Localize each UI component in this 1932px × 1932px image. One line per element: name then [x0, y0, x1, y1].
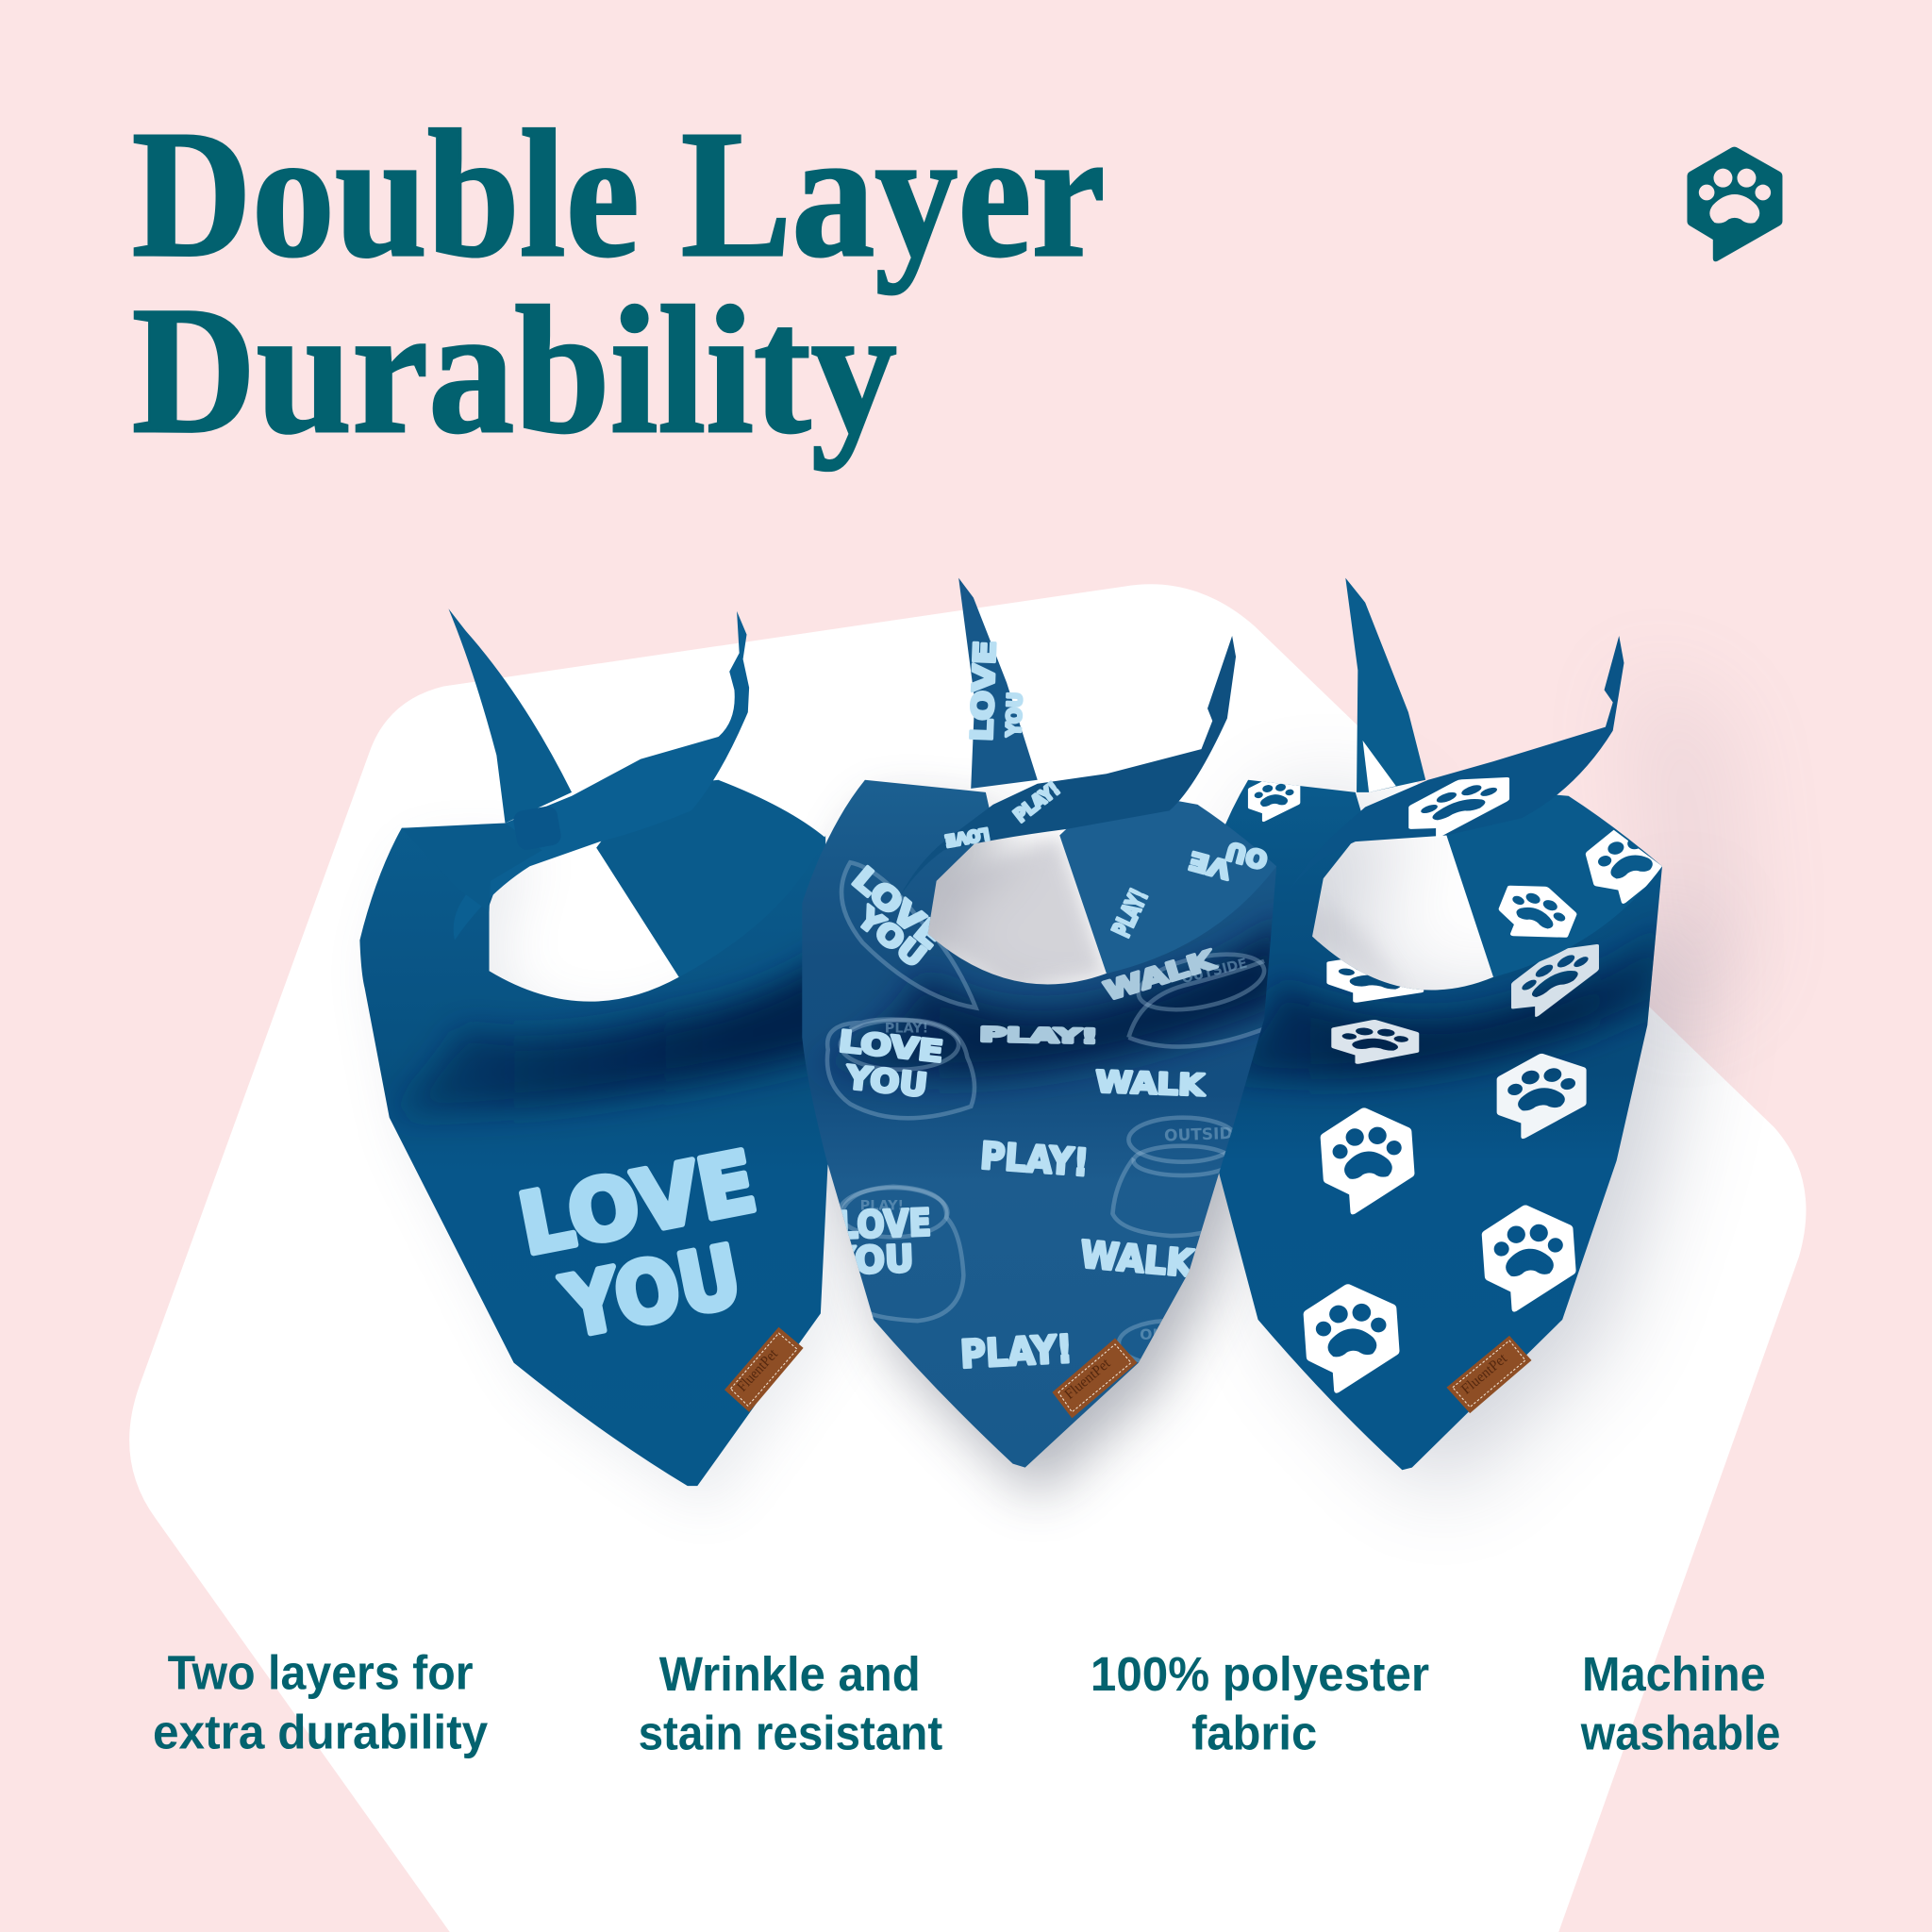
- feature caption: machine washable: [1580, 1647, 1780, 1760]
- bandana: Love You solid: [359, 608, 850, 1486]
- icon: paw speech bubble logo: [1687, 147, 1782, 261]
- pattern words: YOU: [850, 900, 932, 974]
- paw print on knot: [1408, 765, 1509, 846]
- tie tail up: [1345, 578, 1425, 792]
- soft shadows beneath bandanas: [377, 665, 1750, 1506]
- pattern words: WALK: [1101, 945, 1220, 1007]
- print on back panel: [1108, 836, 1271, 941]
- paw prints on body: [1248, 774, 1599, 1395]
- front body: [359, 828, 828, 1486]
- leather tag: [724, 1327, 804, 1412]
- bowl outlines: OUTSIDE: [1164, 1124, 1243, 1145]
- bowl outlines: PLAY!: [860, 1199, 904, 1214]
- tie tail up: LOVE: [965, 640, 1003, 742]
- pattern words: WALK: [1095, 1065, 1207, 1103]
- collar fold shadow: [808, 918, 1288, 1078]
- title: Durability: [132, 269, 897, 471]
- leather tag: [1052, 1338, 1138, 1418]
- band text: [943, 778, 1064, 850]
- collar fold shadow: [1214, 924, 1670, 1079]
- tie band: [454, 611, 749, 941]
- back panel of neck: [1446, 789, 1662, 977]
- bowl outlines: OUTSIDE: [1180, 956, 1249, 987]
- pattern words: LOVE: [837, 1202, 932, 1248]
- pattern words: PLAY!: [959, 1326, 1074, 1377]
- collar fold shadow: [390, 942, 850, 1115]
- print: Love You: YOU: [555, 1227, 748, 1357]
- feature caption: machine washable: washable: [1580, 1707, 1780, 1760]
- feature caption: polyester: 100% polyester: [1091, 1647, 1429, 1701]
- title: Double Layer: [132, 92, 1106, 294]
- print: Love You: [511, 1133, 763, 1357]
- feature caption: wrinkle and stain: Wrinkle and: [659, 1647, 921, 1701]
- print: Love You: LOVE: [511, 1133, 763, 1274]
- pattern words: PLAY!: [979, 1024, 1098, 1048]
- front body: [1201, 780, 1662, 1470]
- leather tag: FluentPet: [1061, 1355, 1114, 1403]
- feature caption: machine washable: Machine: [1582, 1647, 1766, 1701]
- pattern words: WALK: [1078, 1234, 1196, 1286]
- pattern words: PLAY!: [979, 1135, 1090, 1185]
- feature caption: wrinkle and stain: [639, 1647, 942, 1760]
- front body: [802, 780, 1276, 1468]
- bowl outlines: PLAY!: [885, 1022, 928, 1037]
- back panel of neck: [596, 780, 825, 977]
- band text: LOVE: [943, 824, 991, 850]
- bandana: Play Walk Love You pattern: [802, 578, 1288, 1468]
- pattern words: YOU: [828, 1238, 914, 1284]
- feature caption: polyester: fabric: [1191, 1707, 1317, 1760]
- pattern words: YOU: [843, 1058, 929, 1105]
- leather tag: [1446, 1336, 1532, 1413]
- feature caption: two layers: extra durability: [153, 1705, 489, 1758]
- feature caption: two layers: Two layers for: [168, 1646, 474, 1700]
- paws in back panel: [1498, 830, 1662, 938]
- feature caption: wrinkle and stain: stain resistant: [639, 1707, 942, 1760]
- feature caption: two layers: [153, 1646, 489, 1758]
- band text: PLAY!: [1009, 778, 1064, 826]
- tie band: [899, 636, 1236, 897]
- tie tail up: [958, 578, 1038, 789]
- print on back panel: VE: [1186, 845, 1234, 884]
- bowl outlines: OUT: [1140, 1325, 1174, 1343]
- print on back panel: OU: [1223, 836, 1271, 874]
- pattern words: [828, 859, 1220, 1377]
- gap between tie pieces: [1363, 741, 1396, 792]
- leather tag: FluentPet: [734, 1346, 781, 1395]
- tie tail left up: [448, 608, 572, 823]
- tie tail up: YOU: [1002, 691, 1026, 738]
- feature caption: polyester: [1091, 1647, 1429, 1760]
- leather tag: FluentPet: [1458, 1350, 1510, 1398]
- white hexagon panel: [129, 584, 1806, 1932]
- back panel of neck: [1059, 789, 1276, 974]
- tie band: [1285, 636, 1624, 897]
- bowl outlines: [827, 859, 1269, 1377]
- pattern words: LOVE: [844, 859, 950, 957]
- title: [132, 92, 1106, 471]
- knot: [512, 805, 562, 851]
- print on back panel: PLAY!: [1108, 885, 1155, 941]
- pattern words: LOVE: [837, 1024, 945, 1070]
- bandana: paw print pattern: [1201, 578, 1680, 1470]
